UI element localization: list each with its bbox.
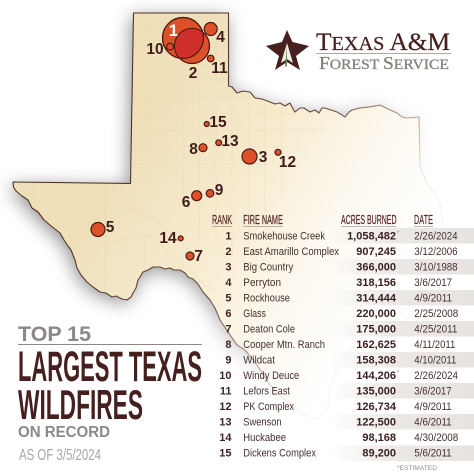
subtitle: ON RECORD — [18, 424, 110, 441]
marker 3: Big Country — [242, 149, 268, 166]
row 10: 144,206 — [356, 370, 396, 382]
row 11: Lefors East — [243, 386, 290, 398]
row 11: 135,000 — [356, 386, 396, 398]
row 14: 14 — [219, 432, 232, 444]
row 9: 9 — [225, 354, 232, 366]
row 3 — [225, 262, 458, 274]
row 2: East Amarillo Complex — [243, 246, 339, 258]
row 3: 3/10/1988 — [414, 262, 458, 274]
row 7: 4/25/2011 — [414, 324, 457, 336]
row 3: Big Country — [243, 262, 294, 274]
marker 4: Perryton: 4 — [216, 29, 225, 46]
row 5: Rockhouse — [243, 292, 290, 304]
marker 2: East Amarillo Complex — [162, 18, 210, 82]
row 12: 4/9/2011 — [414, 401, 452, 413]
icon: star with arrowhead — [266, 30, 309, 70]
table header: DATE — [414, 213, 433, 227]
row 6: 2/25/2008 — [414, 308, 458, 320]
row 15: 89,200 — [362, 448, 396, 460]
fire markers on the map — [91, 18, 296, 265]
row 15: Dickens Complex — [243, 448, 316, 460]
marker 8: Cooper Mtn. Ranch: 8 — [189, 141, 198, 158]
row 12: PK Complex — [243, 401, 294, 413]
marker 8: Cooper Mtn. Ranch — [189, 141, 207, 158]
row 8 — [225, 339, 455, 351]
row 13: 4/6/2011 — [414, 416, 452, 428]
marker 14: Huckabee: 14 — [159, 230, 177, 247]
marker 2: East Amarillo Complex: 2 — [189, 65, 197, 82]
row 9: 158,308 — [356, 354, 396, 366]
map of Texas — [11, 13, 442, 424]
row 4: 4 — [225, 277, 232, 289]
logo wordmark: TEXAS A&M — [316, 29, 450, 56]
row 11 — [220, 386, 452, 398]
footnote: *ESTIMATED — [397, 465, 437, 472]
row 12: 126,734 — [356, 401, 397, 413]
marker 1: Smokehouse Creek — [162, 18, 204, 58]
row 11: 11 — [220, 386, 232, 398]
marker 12: PK Complex — [275, 149, 296, 171]
row 1 — [225, 230, 458, 242]
row 10 — [219, 370, 458, 382]
state shape — [13, 13, 442, 420]
row 15: 15 — [219, 448, 232, 460]
marker 11: Lefors East — [207, 55, 228, 77]
row 14 — [219, 432, 458, 444]
row 2: 2 — [225, 246, 232, 258]
row 1: 2/26/2024 — [414, 230, 458, 242]
row 14: 4/30/2008 — [414, 432, 458, 444]
row 3: 366,000 — [356, 262, 396, 274]
row 7: Deaton Cole — [243, 324, 295, 336]
fire ranking table — [212, 213, 474, 472]
row 9: 4/10/2011 — [414, 354, 456, 366]
row 13: 122,500 — [356, 416, 396, 428]
row 8: Cooper Mtn. Ranch — [243, 339, 325, 351]
row 6 — [225, 308, 458, 320]
table row bands — [330, 228, 474, 461]
row 1: 1 — [225, 230, 232, 242]
marker 11: Lefors East: 11 — [211, 60, 228, 77]
row 15 — [219, 448, 452, 460]
title block — [18, 323, 202, 464]
row 6: 6 — [225, 308, 232, 320]
row 6: Glass — [243, 308, 266, 320]
row 4 — [225, 277, 452, 289]
row 8: 4/11/2011 — [414, 339, 455, 351]
row 13 — [219, 416, 452, 428]
main title line 1: LARGEST TEXAS — [18, 343, 202, 391]
main title line 2: WILDFIRES — [18, 381, 143, 428]
row 10: * — [397, 370, 400, 376]
row 5: 5 — [225, 292, 232, 304]
marker 3: Big Country: 3 — [259, 149, 268, 166]
marker 12: PK Complex: 12 — [279, 154, 296, 171]
map drop shadow — [11, 17, 440, 424]
table header — [212, 213, 433, 227]
table header: FIRE NAME — [243, 213, 283, 227]
row 8: 8 — [225, 339, 232, 351]
state outline — [13, 13, 442, 420]
row 6: 220,000 — [356, 308, 396, 320]
marker 15: Dickens Complex: 15 — [209, 114, 227, 131]
row 5: 4/9/2011 — [414, 292, 452, 304]
marker 10: Windy Deuce — [146, 41, 173, 58]
row 11: 3/6/2017 — [414, 386, 452, 398]
row 13: Swenson — [243, 416, 282, 428]
row 9: Wildcat — [243, 354, 275, 366]
marker 5: Rockhouse: 5 — [106, 219, 115, 236]
row 3: 3 — [225, 262, 232, 274]
marker 6: Glass: 6 — [182, 194, 191, 211]
as-of date: AS OF 3/5/2024 — [19, 447, 101, 464]
table header: RANK — [212, 213, 232, 227]
row 7: 7 — [225, 324, 232, 336]
row 14: Huckabee — [243, 432, 286, 444]
row 10: 2/26/2024 — [414, 370, 458, 382]
row 12 — [219, 401, 452, 413]
row 4: 318,156 — [356, 277, 396, 289]
marker 1: Smokehouse Creek: 1 — [169, 21, 178, 40]
row 2: 907,245 — [356, 246, 396, 258]
logo: Texas A&M Forest Service — [266, 29, 451, 73]
row 10: 10 — [219, 370, 232, 382]
row 7: 175,000 — [356, 324, 396, 336]
row 5: 314,444 — [356, 292, 397, 304]
row 2 — [225, 246, 458, 258]
row 1: 1,058,482 — [347, 230, 396, 242]
marker 5: Rockhouse — [91, 219, 115, 236]
row 10: Windy Deuce — [243, 370, 299, 382]
row 1: Smokehouse Creek — [243, 230, 325, 242]
row 8: 162,625 — [356, 339, 396, 351]
row 1: * — [397, 231, 400, 237]
logo wordmark: FOREST SERVICE — [319, 53, 449, 73]
logo wordmark — [316, 29, 451, 73]
row 15: 5/6/2011 — [414, 448, 452, 460]
marker 13: Swenson: 13 — [221, 133, 239, 150]
row 5 — [225, 292, 452, 304]
marker 7: Deaton Cole: 7 — [194, 248, 203, 265]
marker 9: Wildcat — [206, 182, 224, 199]
marker 6: Glass — [182, 191, 202, 211]
row 14: 98,168 — [362, 432, 396, 444]
title kicker: TOP 15 — [18, 323, 91, 346]
marker 10: Windy Deuce: 10 — [146, 41, 164, 58]
row 4: Perryton — [243, 277, 281, 289]
row 9 — [225, 354, 456, 366]
row 13: 13 — [219, 416, 232, 428]
marker 4: Perryton — [204, 22, 225, 46]
row 12: 12 — [219, 401, 232, 413]
table header: ACRES BURNED — [341, 213, 396, 227]
row 7 — [225, 324, 457, 336]
row 4: 3/6/2017 — [414, 277, 452, 289]
marker 7: Deaton Cole — [186, 248, 203, 265]
row 2: 3/12/2006 — [414, 246, 458, 258]
marker 9: Wildcat: 9 — [215, 182, 224, 199]
